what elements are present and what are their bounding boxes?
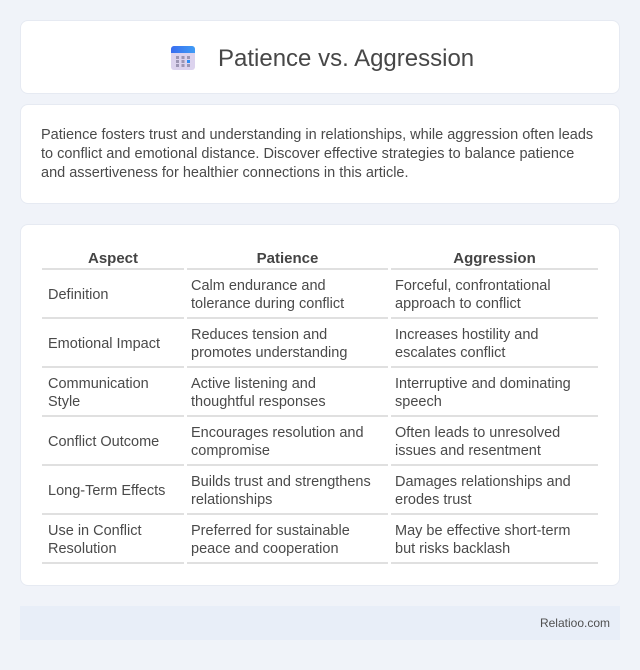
- table headings: Aspect: [88, 250, 138, 267]
- row: Use in Conflict Resolution: May be effective short-term: [395, 523, 570, 539]
- row: Use in Conflict Resolution: peace and cooperation: [191, 541, 339, 557]
- row: Definition: approach to conflict: [395, 296, 521, 312]
- table headings: [88, 250, 536, 267]
- row: Communication Style: Interruptive and dominating: [395, 376, 571, 392]
- row: Conflict Outcome: Conflict Outcome: [48, 434, 159, 450]
- panel: header: [20, 20, 620, 94]
- intro text: and assertiveness for healthier connections in this article.: [41, 165, 409, 181]
- row: Definition: tolerance during conflict: [191, 296, 344, 312]
- row: Emotional Impact: Increases hostility and: [395, 327, 538, 343]
- panel: introduction: [20, 104, 620, 204]
- row: Emotional Impact: [42, 317, 598, 361]
- panel: comparison table: [20, 224, 620, 586]
- row: Conflict Outcome: compromise: [191, 443, 270, 459]
- row: Long-Term Effects: Builds trust and strengthens: [191, 474, 371, 490]
- row: Definition: Forceful, confrontational: [395, 278, 551, 294]
- row: Use in Conflict Resolution: Use in Conflict: [48, 523, 141, 539]
- row: Conflict Outcome: issues and resentment: [395, 443, 541, 459]
- footer bar: [20, 606, 620, 640]
- row: Long-Term Effects: relationships: [191, 492, 272, 508]
- row: Definition: Calm endurance and: [191, 278, 326, 294]
- intro text: Patience fosters trust and understanding in relationships, while aggression often leads: [41, 127, 593, 143]
- table headings: Aggression: [453, 250, 536, 267]
- row: Long-Term Effects: Long-Term Effects: [48, 483, 165, 499]
- row: Conflict Outcome: Often leads to unresolved: [395, 425, 560, 441]
- row: Communication Style: Active listening and: [191, 376, 316, 392]
- row: Long-Term Effects: erodes trust: [395, 492, 472, 508]
- row: Definition: Definition: [48, 287, 108, 303]
- table headings: Patience: [257, 250, 318, 267]
- row: Emotional Impact: promotes understanding: [191, 345, 347, 361]
- row: Conflict Outcome: Encourages resolution and: [191, 425, 364, 441]
- title: Patience vs. Aggression: [218, 45, 474, 72]
- row: Communication Style: Style: [48, 394, 80, 410]
- row: Use in Conflict Resolution: Resolution: [48, 541, 117, 557]
- row: Long-Term Effects: Damages relationships and: [395, 474, 571, 490]
- row: Communication Style: [42, 366, 598, 410]
- row: Emotional Impact: Reduces tension and: [191, 327, 327, 343]
- row: Communication Style: speech: [395, 394, 442, 410]
- row: Use in Conflict Resolution: but risks backlash: [395, 541, 510, 557]
- row: Long-Term Effects: [42, 464, 598, 508]
- intro text: [41, 127, 593, 181]
- row: Emotional Impact: escalates conflict: [395, 345, 505, 361]
- row: Definition: [42, 268, 598, 312]
- row: Use in Conflict Resolution: Preferred for sustainable: [191, 523, 350, 539]
- row: Use in Conflict Resolution: [42, 513, 598, 564]
- icon: calendar: [171, 46, 195, 70]
- row: Communication Style: thoughtful responses: [191, 394, 326, 410]
- row: Emotional Impact: Emotional Impact: [48, 336, 160, 352]
- footer brand: Relatioo.com: [540, 616, 610, 630]
- intro text: to conflict and emotional distance. Discover effective strategies to balance patience: [41, 146, 574, 162]
- row: Communication Style: Communication: [48, 376, 149, 392]
- row: Conflict Outcome: [42, 415, 598, 459]
